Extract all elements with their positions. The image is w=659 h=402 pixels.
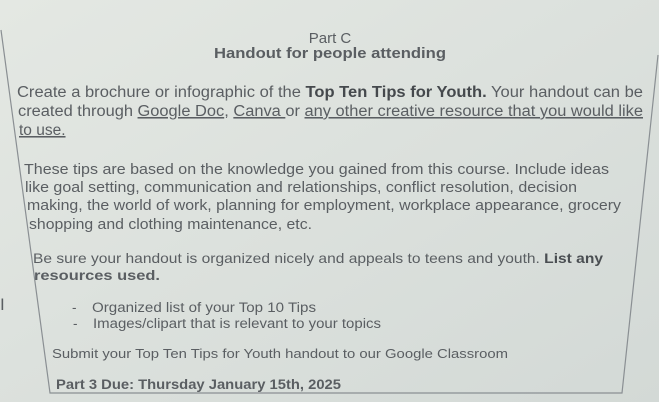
- paragraph: tips: These tips are based on the knowledge you gained from this course. Include ideas: [24, 162, 609, 178]
- submit instruction: Submit your Top Ten Tips for Youth handout to our Google Classroom: [52, 346, 508, 361]
- title: Part C: [309, 30, 351, 47]
- bullet list: Organized list of your Top 10 Tips: [92, 300, 316, 315]
- cursor icon: I: [0, 295, 5, 314]
- paragraph: be sure: Be sure your handout is organized nicely and appeals to teens and youth. List any: [33, 250, 603, 266]
- paragraph: intro: created through Google Doc , Canva or any other creative resource that you would like: [18, 103, 643, 120]
- due date: Part 3 Due: Thursday January 15th, 2025: [56, 377, 342, 392]
- bullet list: Images/clipart that is relevant to your topics: [93, 316, 381, 331]
- bullet list: [72, 300, 381, 331]
- bullet list: -: [73, 316, 78, 331]
- bullet list: -: [72, 300, 76, 315]
- paragraph: intro: [17, 84, 643, 139]
- paragraph: tips: [24, 162, 622, 233]
- paragraph: tips: shopping and clothing maintenance, etc.: [29, 217, 312, 233]
- paragraph: tips: making, the world of work, planning for employment, workplace appearance, grocery: [27, 198, 622, 214]
- paragraph: intro: to use.: [19, 122, 66, 139]
- paragraph: be sure: [33, 250, 603, 283]
- title: Handout for people attending: [214, 45, 446, 62]
- paragraph: intro: Create a brochure or infographic of the Top Ten Tips for Youth. Your handout can be: [17, 84, 643, 101]
- title: [214, 30, 446, 62]
- paragraph: tips: like goal setting, communication and relationships, conflict resolution, decision: [25, 180, 577, 196]
- paragraph: be sure: resources used.: [34, 267, 160, 283]
